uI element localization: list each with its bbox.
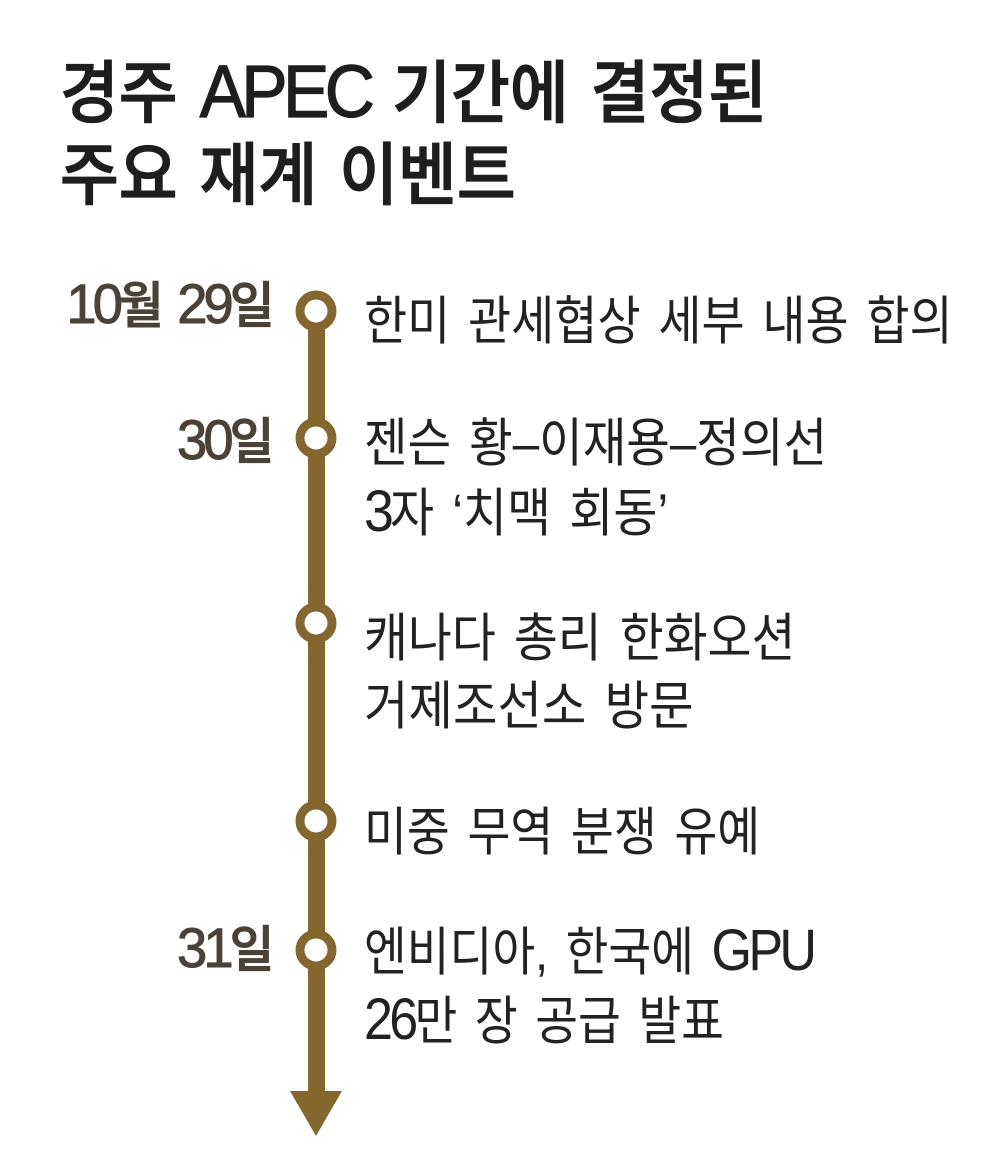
event: 캐나다 총리: 캐나다 총리 한화오션 bbox=[364, 609, 795, 667]
event: 한미 관세협상: 한미 관세협상 세부 내용 합의 bbox=[364, 292, 953, 350]
event: 엔비디아: 엔비디아, 한국에 GPU bbox=[364, 916, 813, 982]
event: 치맥 회동: 젠슨 황–이재용–정의선 bbox=[364, 414, 827, 472]
marker: 31일 bbox=[296, 931, 336, 969]
event: 캐나다 총리: 거제조선소 방문 bbox=[364, 677, 694, 735]
event: 엔비디아: 26만 장 공급 발표 bbox=[364, 985, 724, 1052]
date: 10월 29일: 10월 29일 bbox=[66, 272, 274, 335]
timeline line with arrow bbox=[290, 329, 342, 1136]
title line 2: 주요 재계 이벤트 bbox=[60, 138, 516, 214]
event: 치맥 회동 bbox=[364, 414, 827, 544]
date: 31일: 31일 bbox=[177, 916, 274, 979]
event: 엔비디아 bbox=[364, 916, 813, 1052]
event: 캐나다 총리 bbox=[364, 609, 795, 735]
marker: 30일 bbox=[296, 419, 336, 457]
marker: 미중 bbox=[296, 802, 336, 840]
marker: 캐나다 bbox=[296, 604, 336, 642]
title line 1: 경주 APEC 기간에 결정된 bbox=[60, 50, 767, 133]
event: 미중 무역: 미중 무역 분쟁 유예 bbox=[364, 803, 760, 861]
event: 치맥 회동: 3자 ‘치맥 회동’ bbox=[364, 477, 668, 544]
date: 30일: 30일 bbox=[177, 408, 274, 471]
title bbox=[60, 50, 767, 214]
marker: 10월 29일 bbox=[296, 290, 336, 330]
